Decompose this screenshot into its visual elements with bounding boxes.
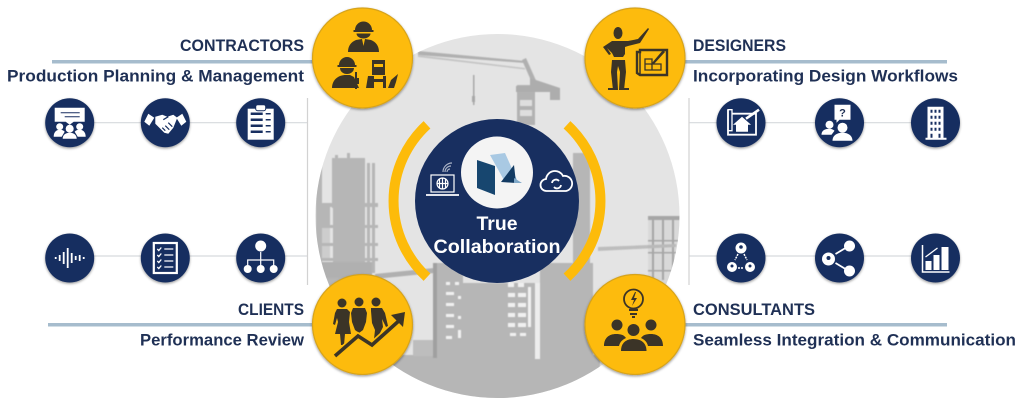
lower building mass <box>380 263 600 400</box>
center hub: True Collaboration <box>415 119 579 283</box>
logo <box>461 136 533 208</box>
icon: laptop with globe <box>426 163 459 195</box>
heading: DESIGNERS <box>693 36 786 55</box>
hub title <box>434 214 560 258</box>
left tower <box>316 152 378 286</box>
icon: people question: ? <box>839 108 846 120</box>
icon: audio wave <box>45 234 94 282</box>
icon: meeting feedback <box>45 98 94 147</box>
hub title: Collaboration <box>434 237 560 258</box>
heading: CONTRACTORS <box>180 36 304 55</box>
panel: consultants <box>585 274 1016 374</box>
heading: CLIENTS <box>238 300 304 319</box>
crane top <box>418 51 560 125</box>
icon: share <box>815 234 864 282</box>
panel: contractors <box>7 8 412 108</box>
icon: clipboard <box>236 98 285 147</box>
subheading: Performance Review <box>140 330 305 350</box>
subheading: Incorporating Design Workflows <box>693 66 958 86</box>
icon: checklist <box>141 234 190 282</box>
panel: clients <box>48 274 412 374</box>
construction silhouettes <box>316 51 680 400</box>
icon: cloud sync <box>540 171 572 191</box>
subheading: Production Planning & Management <box>7 66 304 86</box>
icon: building <box>911 98 960 147</box>
right arc <box>567 125 600 277</box>
icon: idea team badge <box>585 274 685 374</box>
icon: house plan <box>716 98 766 147</box>
icon: bar chart <box>911 234 960 282</box>
icon: workers badge <box>312 8 412 108</box>
right tall tower <box>540 153 593 380</box>
heading: CONSULTANTS <box>693 300 815 319</box>
icon: triangle network <box>716 234 766 282</box>
icon: people question <box>815 98 864 147</box>
lower left crane <box>375 268 434 279</box>
divider rule <box>684 323 947 326</box>
icon: handshake <box>141 98 190 147</box>
icon: designer badge <box>585 8 685 108</box>
hub title: True <box>476 214 518 235</box>
connector lines <box>70 98 935 285</box>
divider rule <box>52 60 314 64</box>
panel: designers <box>585 8 958 108</box>
divider rule <box>48 323 314 326</box>
background: construction site circle <box>316 34 680 400</box>
left arc <box>394 125 427 277</box>
subheading: Seamless Integration & Communication <box>693 330 1016 350</box>
right scaffold and crane <box>598 216 680 286</box>
icon: org chart <box>236 234 285 282</box>
divider rule <box>684 60 947 64</box>
icon: team growth badge <box>312 274 412 374</box>
